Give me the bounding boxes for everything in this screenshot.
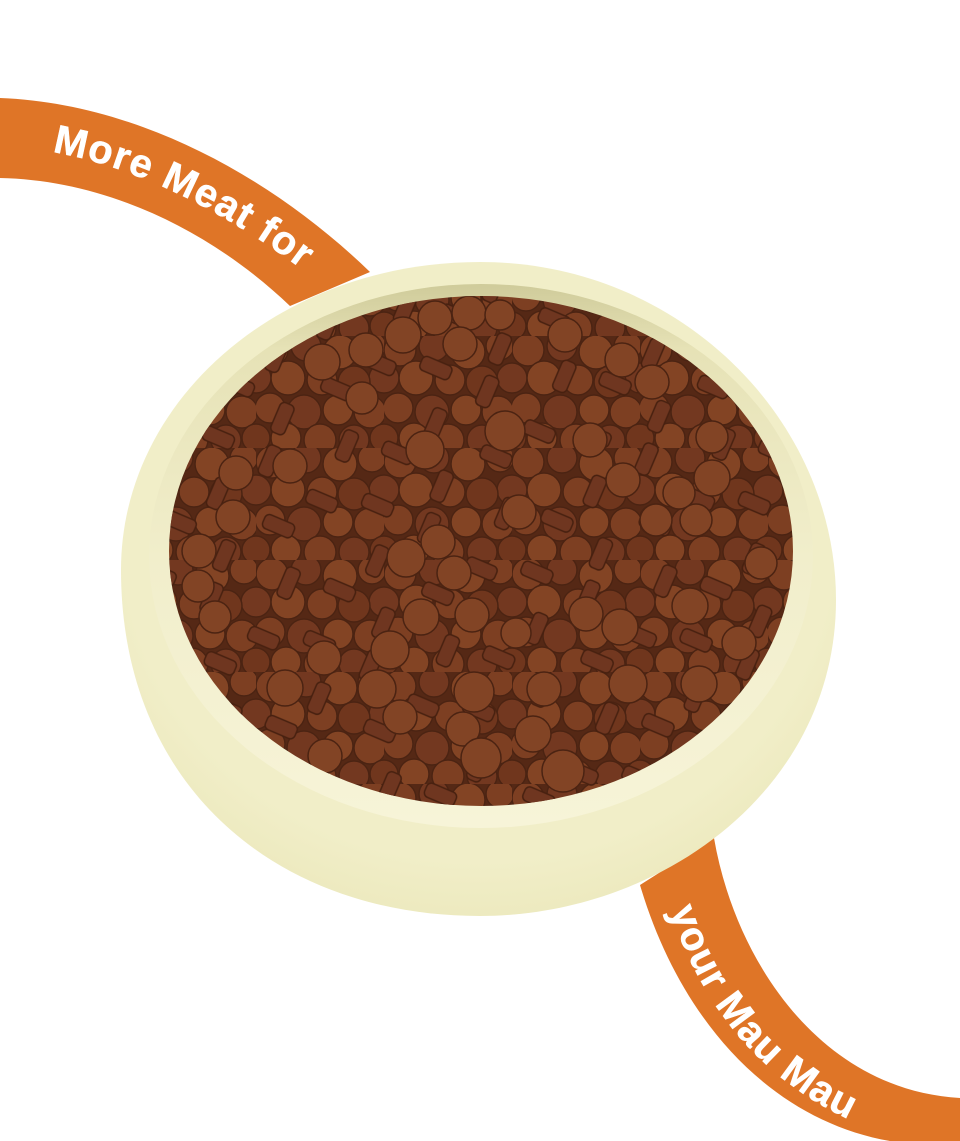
kibble side-on pieces bbox=[169, 296, 793, 806]
ribbon text: your Mau Mau: your Mau Mau bbox=[662, 902, 856, 1118]
kibble base bbox=[169, 296, 793, 806]
kibble pieces bbox=[182, 296, 777, 792]
bowl body bbox=[121, 262, 836, 916]
bowl with kibble bbox=[121, 262, 836, 916]
bowl inner wall bbox=[149, 284, 813, 828]
ribbon text: More Meat for: More Meat for bbox=[54, 125, 314, 265]
ribbon: top left bbox=[0, 98, 370, 306]
ribbon: bottom right bbox=[640, 838, 960, 1141]
